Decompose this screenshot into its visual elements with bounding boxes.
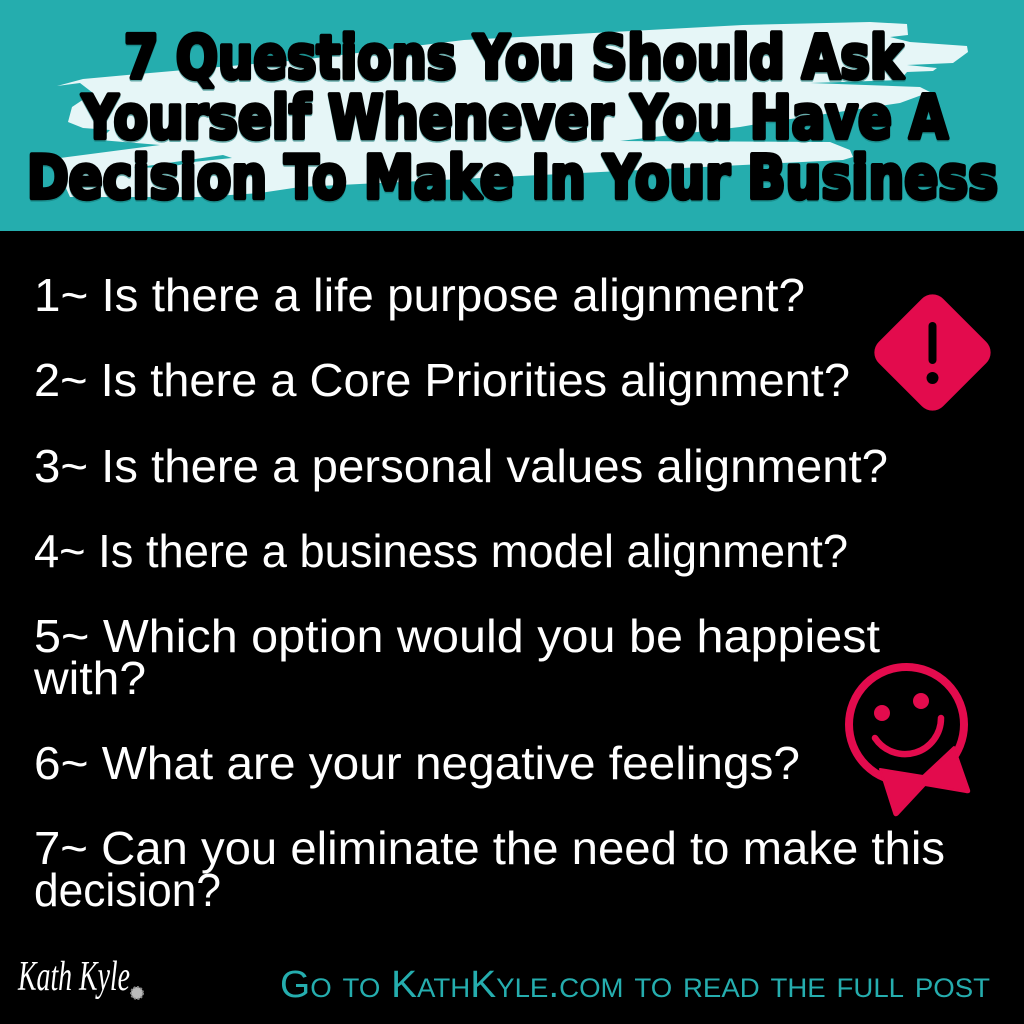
title [27,23,998,214]
brush stroke [57,22,968,197]
question 5: with? [33,652,146,704]
question 3: 3~ Is there a personal values alignment? [34,440,888,492]
question 7: decision? [34,864,221,916]
question 5: 5~ Which option would you be happiest [34,610,880,662]
question 1: 1~ Is there a life purpose alignment? [34,269,805,321]
question 4: 4~ Is there a business model alignment? [34,525,848,577]
question list [33,269,945,916]
icon: smiley with bow tie [849,667,969,815]
header banner [0,0,1024,231]
icon: warning diamond [868,288,997,417]
question 6: 6~ What are your negative feelings? [34,737,800,789]
question 2: 2~ Is there a Core Priorities alignment? [34,354,850,406]
icon: mandala [131,987,143,999]
question 7: 7~ Can you eliminate the need to make this [34,822,945,874]
question 7 [34,822,945,916]
question 5 [33,610,880,704]
footer logo signature: Kath Kyle [17,954,130,1000]
footer call to action: Go to KathKyle.com to read the full post [280,964,990,1006]
